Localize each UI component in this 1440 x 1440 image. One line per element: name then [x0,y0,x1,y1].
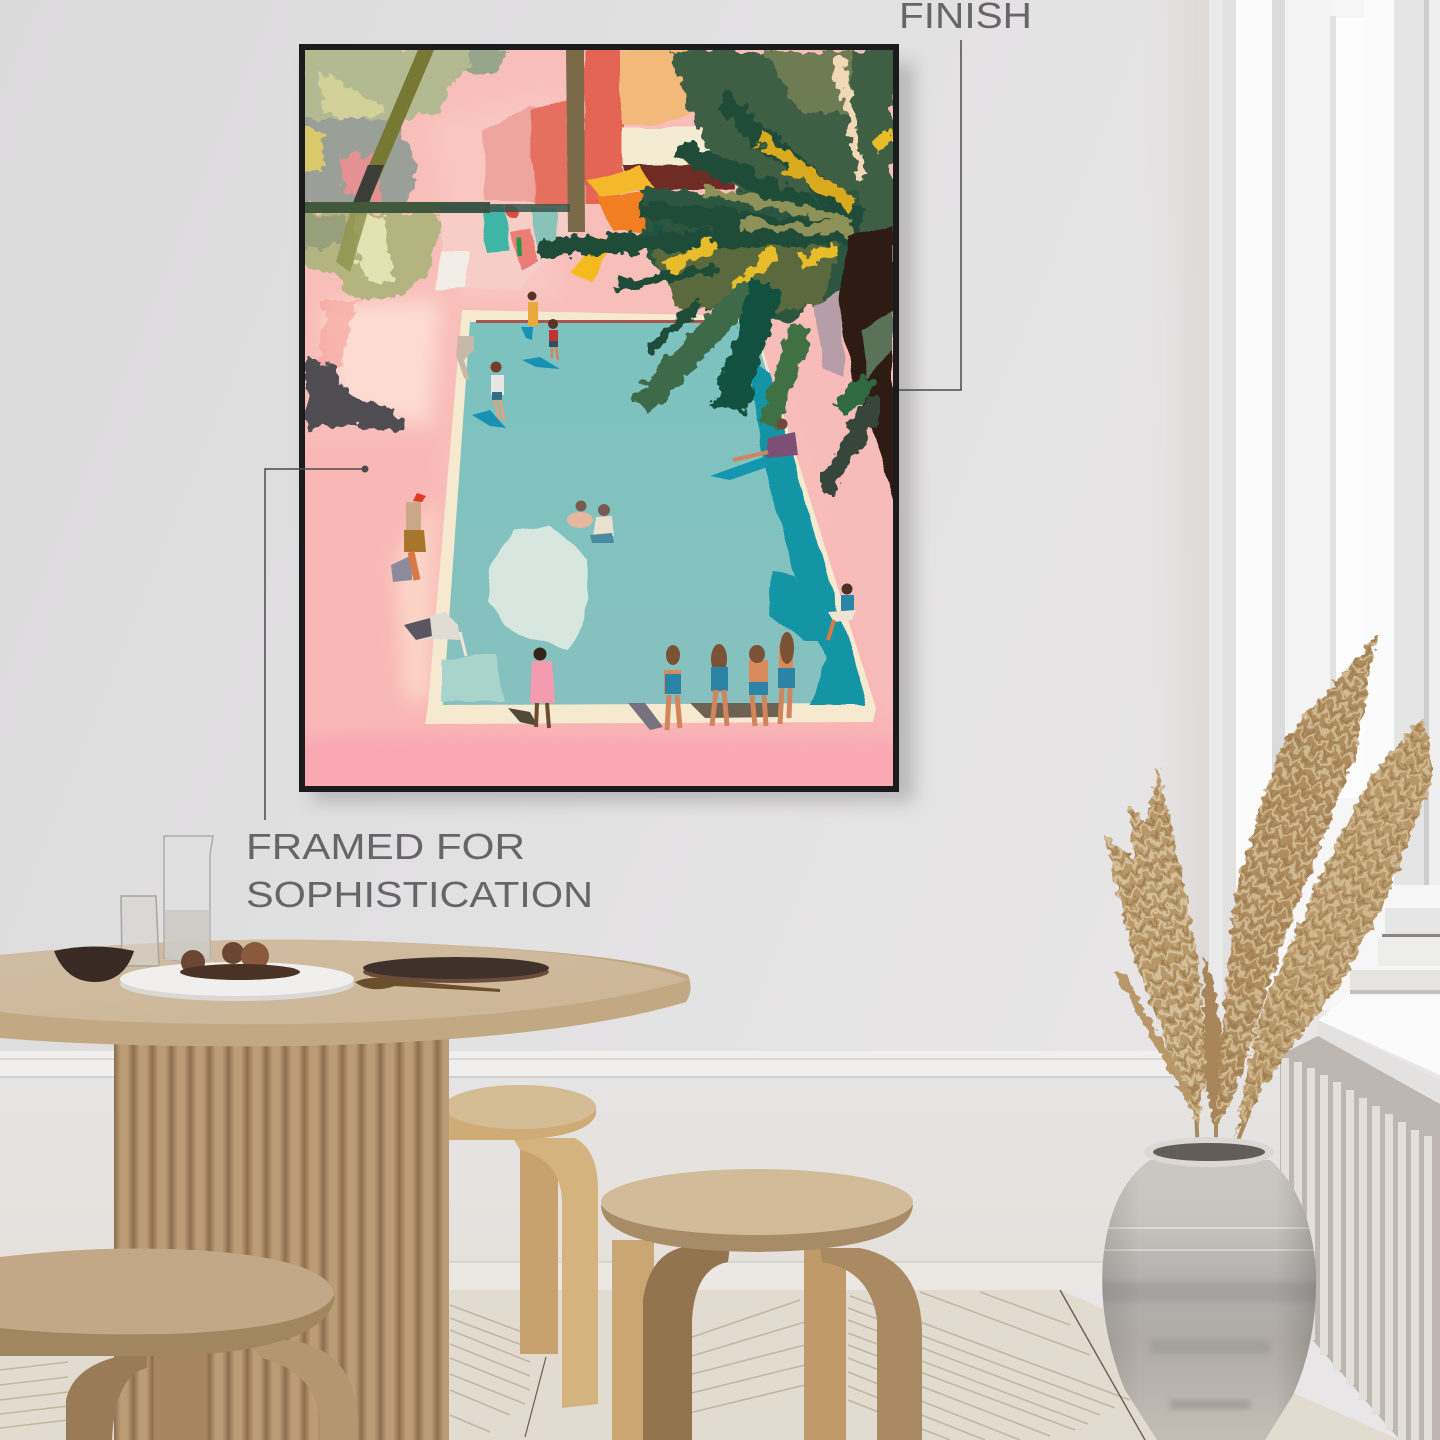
spoon [355,978,500,992]
small centre plume [1203,955,1225,1125]
figure group: four women at pool end [664,632,795,730]
dark bowl [54,946,134,982]
lounge chair [404,612,466,656]
palm shadow on left deck [305,358,405,432]
horizontal and diagonal glass reflection [305,50,570,272]
glass carafe [164,836,213,962]
round table top [0,940,691,1046]
marble plate [120,962,354,1001]
back stool [444,1085,598,1408]
right palm mass [590,50,893,320]
lower wall panel and chair rail [0,1051,1290,1290]
callout label: framed for sophistication: FRAMED FOR [246,826,525,867]
right plume [1237,717,1433,1138]
herringbone wood floor [0,1290,1400,1440]
figures at top of pool [456,292,560,428]
pale and deep brush patches [305,266,893,786]
water in carafe [165,910,210,960]
pink ground [305,50,893,786]
front left stool [0,1248,358,1440]
drinking glass [121,896,159,966]
painting surface [290,45,905,800]
palm trunk right [813,225,893,500]
frame shadow on wall [312,62,914,802]
shadows at pool end [508,703,780,730]
front right stool [601,1169,922,1440]
lower right frond [825,380,875,490]
fluted table base [114,1030,449,1440]
framed painting [290,44,905,800]
ceramic vase [1095,1137,1320,1440]
table setting [54,836,549,1001]
pool top red line [476,320,704,323]
tall middle plume [1217,636,1377,1125]
poolside clutter [435,205,612,290]
pampas grass [1105,636,1433,1155]
window sill with books [1318,885,1440,1102]
figure: woman on left deck [391,493,426,582]
pool water [443,322,864,705]
right palm fronds [540,56,890,425]
building blocks at top [440,50,745,290]
lower left palm fan [305,213,442,370]
left plume [1105,767,1206,1128]
callout label second line: SOPHISTICATION [246,874,593,915]
figure: girl in pink [530,648,555,728]
palm trunk in centre [566,50,585,232]
stems [1196,1110,1250,1155]
figure on right edge [710,418,856,640]
nuts [180,942,300,980]
black frame [299,44,899,792]
cloud reflection in water [442,526,590,702]
window frame and moulding [1197,0,1440,1010]
upper left palm fronds [300,45,510,205]
callout: finish leader line [899,40,961,390]
radiator [1280,1036,1440,1440]
callout: framed leader line [265,466,368,820]
figures in water [567,500,614,543]
shade near window corner [1130,0,1198,1050]
dark plate [363,957,549,983]
pool shadow on right side [748,360,866,705]
pool edge [425,310,876,724]
